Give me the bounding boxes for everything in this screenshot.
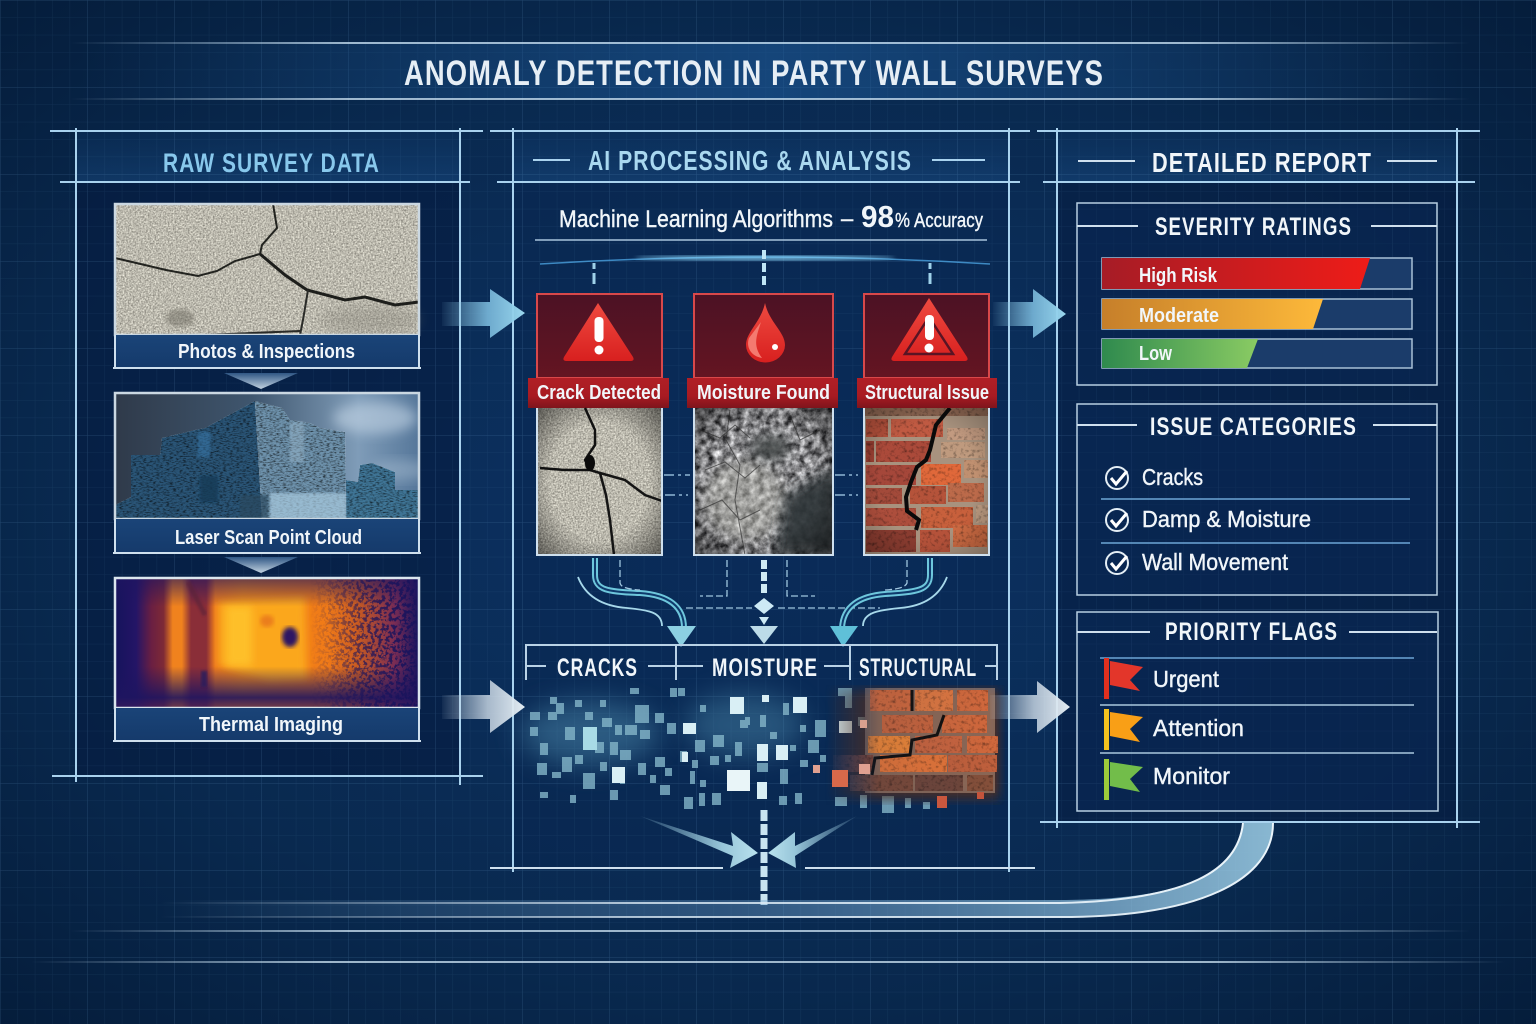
accuracy text: Accuracy [914,210,983,232]
photo: thermal imaging [115,578,420,708]
panel: issue categories: ISSUE CATEGORIES [1150,413,1357,441]
heading: raw survey data: RAW SURVEY DATA [163,148,380,178]
accuracy text: – [841,206,854,231]
bar: low: Low [1139,343,1172,365]
photo: damp wall [694,408,840,555]
title: ANOMALY DETECTION IN PARTY WALL SURVEYS [404,54,1104,93]
label: moisture found [687,378,838,408]
label: moisture found: Moisture Found [697,382,830,404]
arrow: analysis to report top [993,289,1066,338]
arrow: report feedback curve [160,823,1273,917]
category labels: CRACKS [557,654,638,682]
accuracy text [535,199,987,240]
bar: moderate: Moderate [1139,305,1219,327]
brick wall fragment: structural [813,688,1000,808]
arrows: flows into categories [578,558,947,647]
panel: severity ratings: SEVERITY RATINGS [1155,213,1352,241]
flag: urgent [1104,658,1220,699]
bar: high risk: High Risk [1139,265,1218,287]
panel: priority flags: PRIORITY FLAGS [1165,618,1338,646]
item: damp and moisture: Damp & Moisture [1142,506,1311,532]
caption: laser scan point cloud: Laser Scan Point Cloud [175,527,362,549]
icon: outlined warning triangle [891,298,968,361]
lines: bottom rails [30,930,1506,963]
flag: attention [1104,709,1244,750]
arrow: data to analysis bottom [442,680,525,733]
item: cracks: Cracks [1142,464,1203,490]
photo: laser scan point cloud [115,393,430,519]
caption: photos and inspections [113,335,421,368]
arrow: analysis to report bottom [990,681,1070,733]
caption: thermal imaging: Thermal Imaging [199,714,343,736]
heading: ai processing: AI PROCESSING & ANALYSIS [588,145,912,176]
bar: moderate [1102,299,1412,329]
panel: severity ratings [1077,203,1437,385]
panel: ai processing and analysis [30,128,1506,963]
alert card: structural issue [857,294,997,555]
photo: cracked brick wall [864,408,989,555]
flag: attention: Attention [1153,715,1244,741]
heading: detailed report: DETAILED REPORT [1152,147,1372,178]
label: crack detected: Crack Detected [537,382,661,404]
item: wall movement: Wall Movement [1142,549,1289,575]
data fragments: anomaly pixels [520,688,930,813]
arrow: data to analysis top [442,289,525,338]
arrow: chevron down [224,373,298,389]
item: cracks [1106,464,1203,490]
arrows: converge to centre [640,816,857,868]
caption: photos and inspections: Photos & Inspections [178,341,355,363]
bar: low [1102,339,1412,368]
accuracy text: % [895,210,910,232]
panel: issue categories [1077,404,1437,595]
accuracy text: 98 [861,199,894,234]
panel: detailed report [1037,128,1480,828]
connector: centre dashes [760,810,768,905]
connector: glow bar [540,250,990,288]
icon: warning triangle [563,303,634,361]
connectors: side dashes between photos [664,475,858,495]
category labels: STRUCTURAL [859,654,977,682]
arrows: panel connectors [442,289,1070,733]
icon: water drop [746,303,785,362]
caption: thermal imaging [113,708,421,741]
arrow: chevron down [224,557,298,573]
flag: monitor: Monitor [1153,763,1230,789]
label: structural issue [857,378,997,408]
panel: raw survey data [50,128,483,785]
flag: urgent: Urgent [1153,666,1220,692]
alert card: crack detected [528,294,669,555]
category labels: MOISTURE [712,654,818,682]
caption: laser scan point cloud [113,519,421,553]
accuracy text: Machine Learning Algorithms [559,206,833,233]
photo: crack [537,408,662,555]
panel: priority flags [1077,612,1438,811]
label: crack detected [528,378,669,408]
flag: monitor [1104,759,1230,800]
label: structural issue: Structural Issue [865,382,989,404]
photo: concrete crack [115,204,420,335]
category labels [526,645,997,682]
alert card: moisture found [687,294,840,555]
title [70,42,1470,100]
bar: high risk [1102,258,1412,289]
